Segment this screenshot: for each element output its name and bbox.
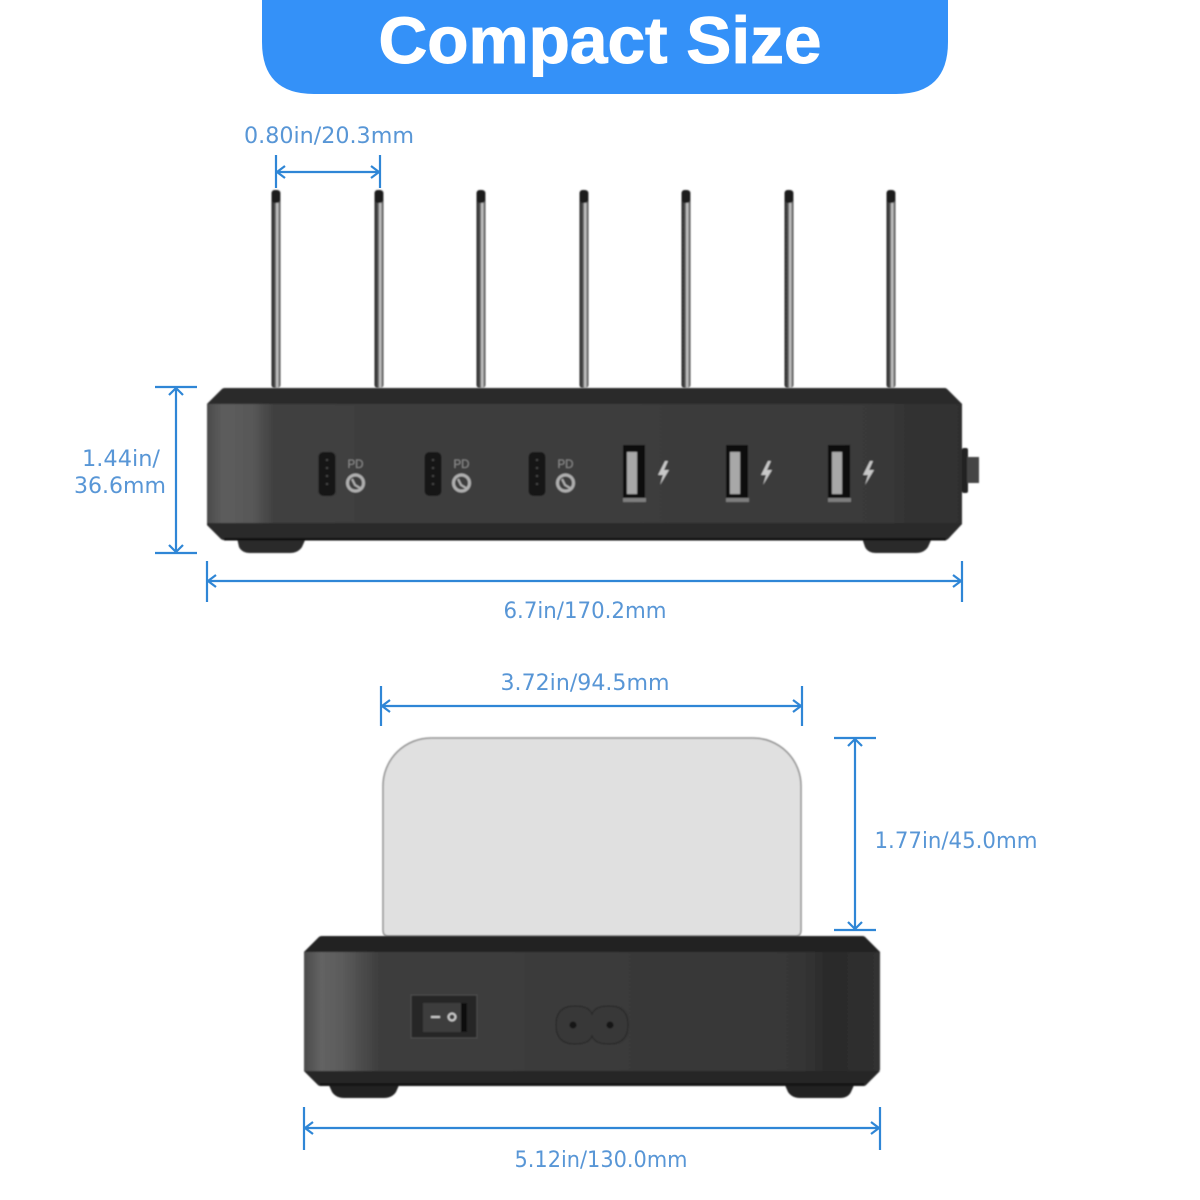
dimension: rear width: 5.12in/130.0mm — [514, 1148, 688, 1173]
title banner — [262, 0, 948, 94]
dimension: device height: 1.77in/45.0mm — [874, 829, 1038, 854]
USB-C PD ports — [318, 452, 574, 496]
USB-A ports — [623, 445, 874, 502]
dimension: divider spacing — [244, 124, 414, 188]
device dividers — [272, 190, 896, 388]
dimension: front width — [207, 561, 962, 624]
dimension: depth top — [381, 671, 802, 726]
front body — [207, 388, 962, 540]
dimension: front height: 36.6mm — [74, 474, 166, 499]
dimension: depth top: 3.72in/94.5mm — [500, 671, 670, 696]
dimension: front height: 1.44in/ — [82, 447, 161, 472]
title: Compact Size — [378, 3, 822, 77]
rear view charging station — [304, 936, 880, 1098]
front rubber feet — [237, 538, 932, 553]
front view charging station — [207, 388, 979, 553]
rocker power switch — [411, 995, 477, 1038]
dimension: front width: 6.7in/170.2mm — [504, 599, 666, 624]
rear body — [304, 936, 880, 1086]
dimension: rear width — [304, 1107, 880, 1173]
dimension: front height — [74, 387, 197, 553]
dimension: divider spacing: 0.80in/20.3mm — [244, 124, 414, 149]
AC power socket — [556, 1006, 628, 1044]
dimension: device height — [834, 738, 1038, 930]
device tablet — [383, 738, 801, 936]
side power switch — [962, 448, 979, 493]
rear rubber feet — [328, 1083, 855, 1098]
